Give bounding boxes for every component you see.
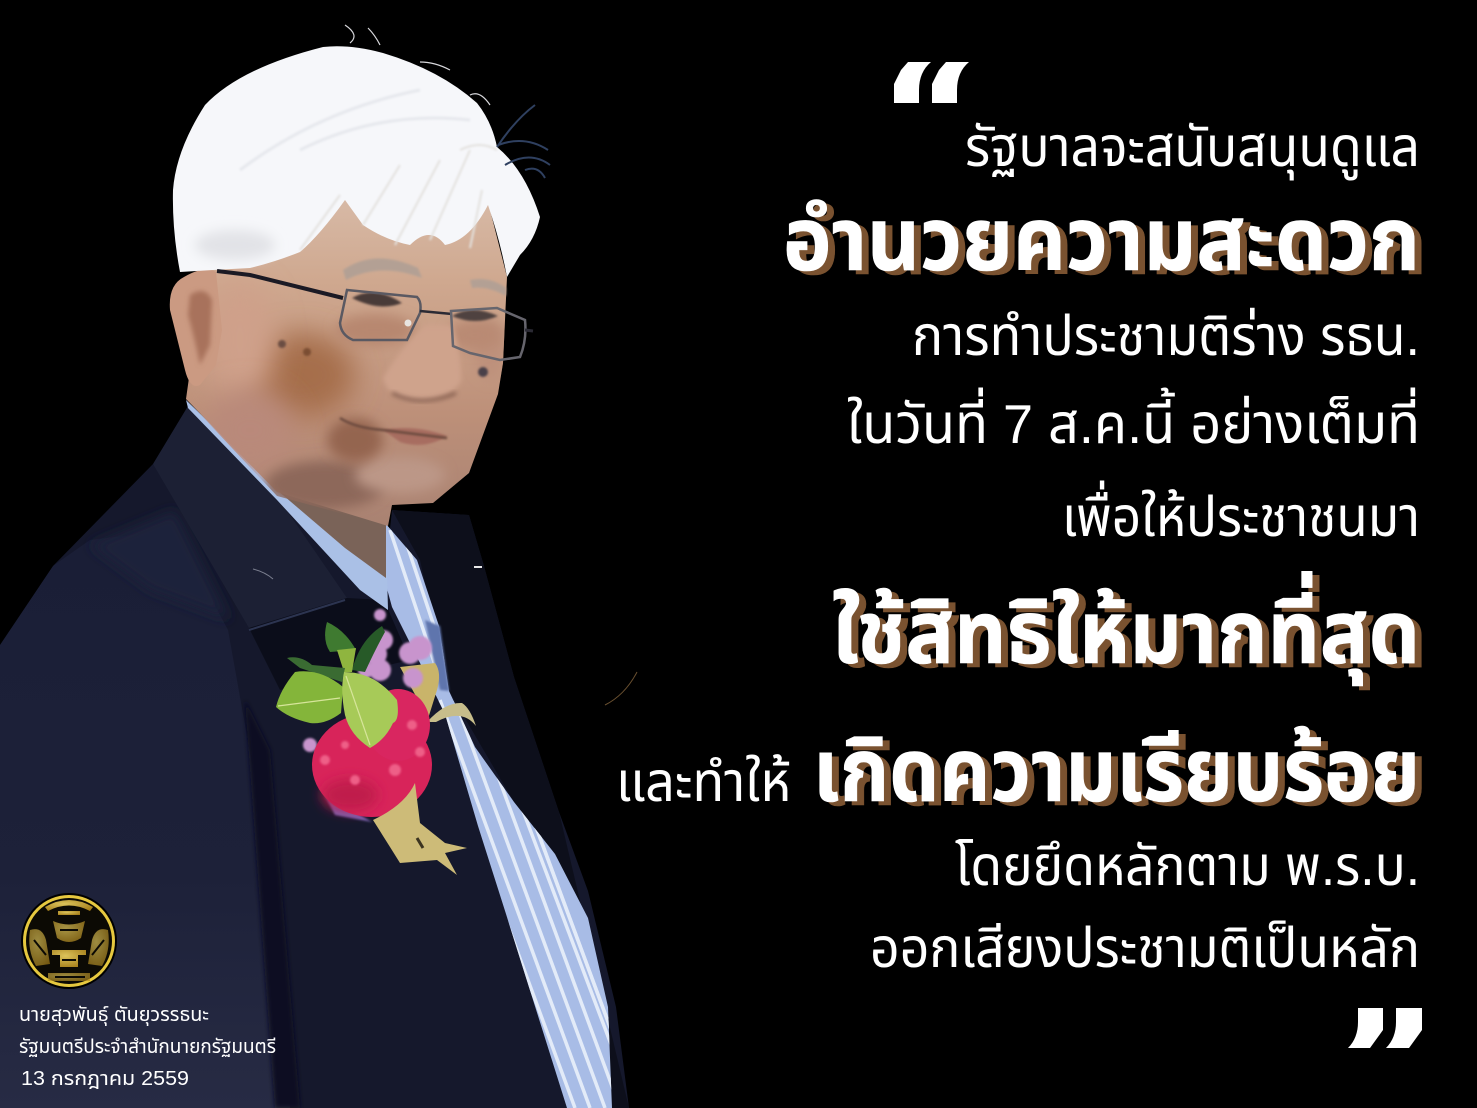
ear (170, 269, 222, 386)
line 8: โดยยึดหลักตาม พ.ร.บ. (955, 835, 1420, 897)
highlighted line: ใช้สิทธิให้มากที่สุด: ใช้สิทธิให้มากที่สุด (839, 575, 1427, 690)
corsage (276, 609, 476, 875)
caption: name: นายสุวพันธุ์ ตันยุวรรธนะ (19, 1004, 209, 1026)
portrait of the minister (0, 25, 640, 1108)
line 1: รัฐบาลจะสนับสนุนดูแล (965, 116, 1420, 181)
caption: position: รัฐมนตรีประจำสำนักนายกรัฐมนตรี (19, 1036, 276, 1058)
line 5: เพื่อให้ประชาชนมา (1062, 480, 1420, 548)
highlighted line: เกิดความเรียบร้อย: เกิดความเรียบร้อย (813, 721, 1420, 820)
caption: date: 13 กรกฎาคม 2559 (21, 1068, 189, 1090)
closing quote mark (1348, 1008, 1422, 1048)
pink carnation (312, 689, 432, 817)
eyebrows (343, 258, 422, 280)
face and neck (186, 200, 508, 526)
moles (478, 367, 488, 377)
gold bird (373, 783, 467, 875)
line 3: การทำประชามติร่าง รธน. (912, 305, 1420, 367)
line 9: ออกเสียงประชามติเป็นหลัก (870, 917, 1420, 979)
light green leaves (276, 671, 343, 723)
jacket (0, 406, 629, 1108)
dark green leaves (325, 622, 356, 652)
gold leaf wrap (400, 663, 439, 722)
eyes (352, 293, 402, 307)
seal of the Prime Minister's Office (21, 893, 117, 989)
line 7 lead-in: และทำให้ (616, 751, 791, 813)
shirt (386, 525, 612, 1108)
hair (173, 25, 550, 277)
highlighted line: ใช้สิทธิให้มากที่สุด: ใช้สิทธิให้มากที่สุด (832, 571, 1420, 686)
line 4: ในวันที่ 7 ส.ค.นี้ อย่างเต็มที่ (847, 387, 1420, 455)
highlighted line: เกิดความเรียบร้อย: เกิดความเรียบร้อย (820, 725, 1427, 824)
glasses (217, 271, 533, 360)
mouth (340, 418, 447, 445)
stray hair mark (605, 672, 637, 705)
highlighted line: อำนวยความสะดวก: อำนวยความสะดวก (790, 194, 1427, 293)
caption: name, position and date (19, 1004, 276, 1090)
shirt collar (186, 400, 388, 610)
opening quote mark (894, 62, 969, 103)
lilac flowers (303, 609, 432, 752)
nose (383, 325, 461, 402)
quote text (616, 116, 1427, 979)
highlighted line: อำนวยความสะดวก: อำนวยความสะดวก (783, 190, 1420, 289)
